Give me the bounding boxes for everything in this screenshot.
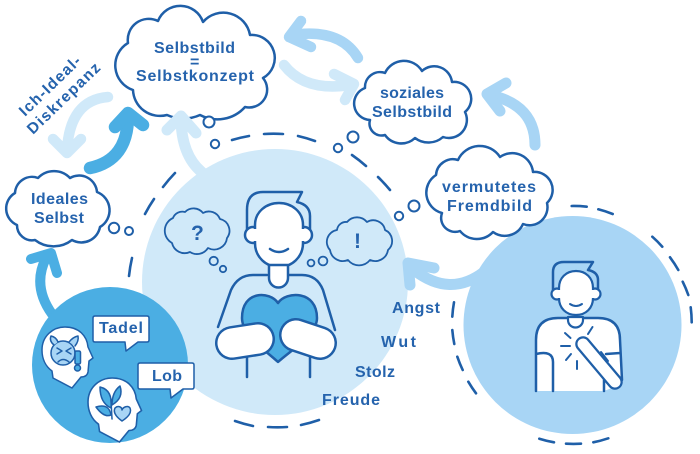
emotions list — [322, 300, 441, 409]
arrow: ideal self up to self-image — [90, 113, 143, 168]
central person — [218, 192, 335, 377]
hair — [247, 192, 310, 232]
body — [218, 275, 335, 377]
cloud: Ideales Selbst: Selbst — [34, 210, 85, 227]
thought bubbles: vermutetes Fremdbild — [395, 200, 420, 220]
head: praise — [88, 378, 142, 442]
face — [559, 271, 593, 315]
ears — [245, 227, 312, 243]
cloud: vermutetes Fremdbild: Fremdbild — [447, 198, 532, 215]
hair — [553, 262, 598, 290]
shirt — [536, 318, 622, 391]
central light circle — [142, 149, 408, 415]
arrow: feedback circle to ideal self — [31, 253, 57, 314]
dashed ring around right person — [452, 206, 692, 444]
arrow: central self to self-image — [167, 116, 207, 176]
ears — [552, 288, 600, 300]
neck — [269, 265, 288, 288]
cloud: soziales Selbstbild: soziales — [380, 85, 444, 102]
dashed ring around central person — [129, 134, 390, 427]
arrow: ich-ideal discrepancy down — [53, 97, 108, 153]
emotions list: Angst — [392, 300, 441, 317]
cloud: vermutetes Fremdbild — [426, 146, 553, 239]
cloud: soziales Selbstbild: Selbstbild — [372, 104, 452, 121]
cloud: Ideales Selbst — [6, 171, 110, 246]
right circle — [464, 216, 682, 434]
cloud: Selbstbild — [115, 6, 275, 119]
emotions list: Freude — [322, 392, 380, 409]
thought cloud: question mark: ? — [191, 222, 204, 245]
speech bubble: Lob: Lob — [152, 368, 182, 385]
feedback circle — [32, 287, 188, 443]
cloud: Selbstbild: Selbstkonzept — [136, 68, 255, 85]
speech bubble: Tadel — [93, 316, 149, 351]
arrow: social self-image to self-image, upper — [289, 21, 358, 58]
neck — [568, 317, 583, 328]
label: Ich-Ideal-Diskrepanz: Ich-Ideal- — [16, 53, 85, 120]
feedback heads and speech bubbles — [42, 316, 194, 442]
arrow: presumed image to social self-image — [487, 83, 535, 145]
thought bubbles: Selbstbild — [204, 116, 219, 148]
thought cloud: exclamation mark — [308, 217, 392, 266]
arms — [232, 335, 320, 343]
emotions list: Stolz — [355, 364, 395, 381]
right person — [536, 262, 622, 391]
cloud: Ideales Selbst: Ideales — [31, 191, 88, 208]
cloud: vermutetes Fremdbild: vermutetes — [442, 179, 536, 196]
cloud: Selbstbild: = — [190, 54, 199, 71]
thought cloud: question mark — [165, 208, 229, 272]
cloud: Selbstbild: Selbstbild — [154, 40, 235, 57]
arm — [583, 344, 615, 382]
speech bubble: Lob — [138, 363, 194, 398]
arrow: right person to central circle — [408, 263, 484, 285]
heart — [242, 295, 317, 362]
arrow: self-image to social self-image, lower — [284, 65, 354, 100]
speech bubble: Tadel: Tadel — [99, 320, 143, 337]
cloud: soziales Selbstbild — [354, 61, 471, 143]
label: Ich-Ideal-Diskrepanz: Diskrepanz — [24, 59, 104, 138]
rays — [561, 327, 608, 369]
thought bubbles: Ideales Selbst — [109, 223, 133, 235]
emotions list: Wut — [381, 334, 417, 351]
head: criticism — [42, 327, 93, 388]
thought cloud: exclamation mark: ! — [354, 230, 361, 253]
smile — [570, 304, 582, 306]
face — [255, 203, 303, 267]
smile — [270, 249, 288, 252]
thought bubbles: soziales Selbstbild — [334, 132, 358, 152]
